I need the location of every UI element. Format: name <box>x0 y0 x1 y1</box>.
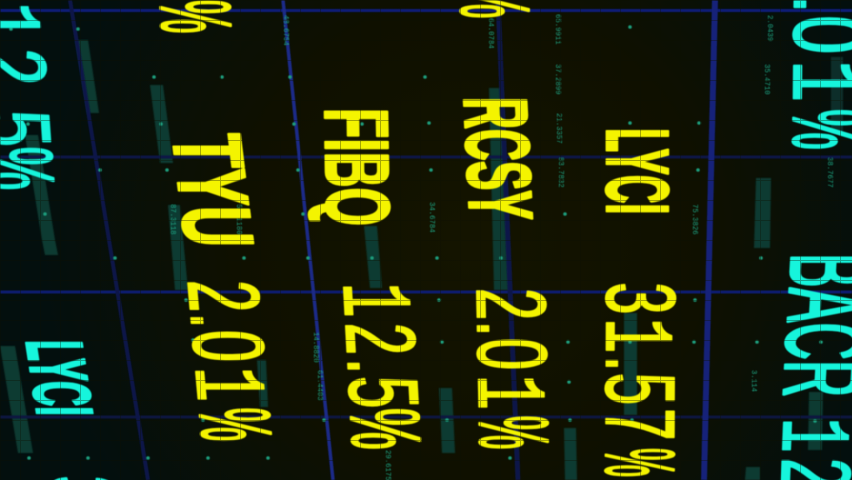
value: 12.5%: 5 <box>327 376 438 408</box>
value: 12.5%: % <box>329 408 441 450</box>
value: 31.57%: 7 <box>584 408 694 440</box>
value: 31.57% <box>576 282 695 477</box>
small data readouts: 37.2899 <box>553 64 561 95</box>
small data readouts: 65.9911 <box>553 14 561 45</box>
value: TYU 2.01% <box>157 280 292 441</box>
small data readouts: 14.8820 <box>311 332 319 363</box>
value: 12.5%: 2 <box>324 323 435 355</box>
value: cropped percent top left: % <box>138 0 251 33</box>
value: 31.57%: 3 <box>585 282 695 315</box>
value: 12.5%: . <box>326 358 436 374</box>
small data readouts: 3.114 <box>749 370 757 393</box>
small data readouts: 52.1180 <box>234 204 242 235</box>
ticker: LYCI yellow: LYCI <box>588 128 686 214</box>
small data readouts: 75.3826 <box>690 204 698 235</box>
value: TYU 2.01%: 0 <box>170 330 285 362</box>
value: BACR 12 <box>751 418 852 480</box>
value: RCSY 2.01%: 2 <box>455 288 565 320</box>
small data readouts: 2.0439 <box>765 15 773 41</box>
value: TYU 2.01%: 2 <box>166 280 280 312</box>
ticker: FIBQ: FIBQ <box>305 108 407 226</box>
value: 31.57%: 5 <box>584 373 694 405</box>
small data readouts: 87.3118 <box>168 204 176 235</box>
small data readouts: 34.6784 <box>427 202 435 233</box>
value: 12.5% <box>313 283 441 450</box>
small data readouts: 48.6754 <box>281 15 289 46</box>
small data readouts: 61.4403 <box>315 370 323 401</box>
small data readouts: 38.7677 <box>825 157 833 188</box>
small data readouts: 21.3357 <box>554 113 562 144</box>
small data readouts: 35.4710 <box>762 64 770 95</box>
value: TYU 2.01%: 1 <box>165 367 282 402</box>
small data readouts <box>168 14 833 480</box>
small data readouts: 83.7832 <box>556 157 564 188</box>
value: TYU 2.01%: . <box>169 312 282 329</box>
value: RCSY 2.01%: % <box>459 416 569 449</box>
value: 12.5%: 1 <box>313 283 426 318</box>
value: 31.57%: . <box>585 355 694 371</box>
value: left 12.5% <box>0 2 73 190</box>
value: RCSY 2.01%: 1 <box>448 375 560 410</box>
value: 31.57%: 1 <box>576 318 687 353</box>
value: RCSY 2.01%: 0 <box>456 338 566 370</box>
ticker: LYCI cyan: LYCI <box>8 340 109 416</box>
small data readouts: 64.0784 <box>486 18 494 49</box>
value: TYU 2.01%: % <box>177 408 292 441</box>
ticker: TYU: TYU <box>150 133 274 247</box>
value: RCSY 2.01% <box>447 288 569 449</box>
small data readouts: 29.6175 <box>383 450 391 480</box>
value: 31.57%: % <box>585 448 693 477</box>
value: RCSY 2.01%: . <box>456 320 566 337</box>
yellow tickers and percentages <box>138 0 695 477</box>
value: top right .01% <box>763 0 852 150</box>
ticker: RCSY: RCSY <box>444 97 550 220</box>
